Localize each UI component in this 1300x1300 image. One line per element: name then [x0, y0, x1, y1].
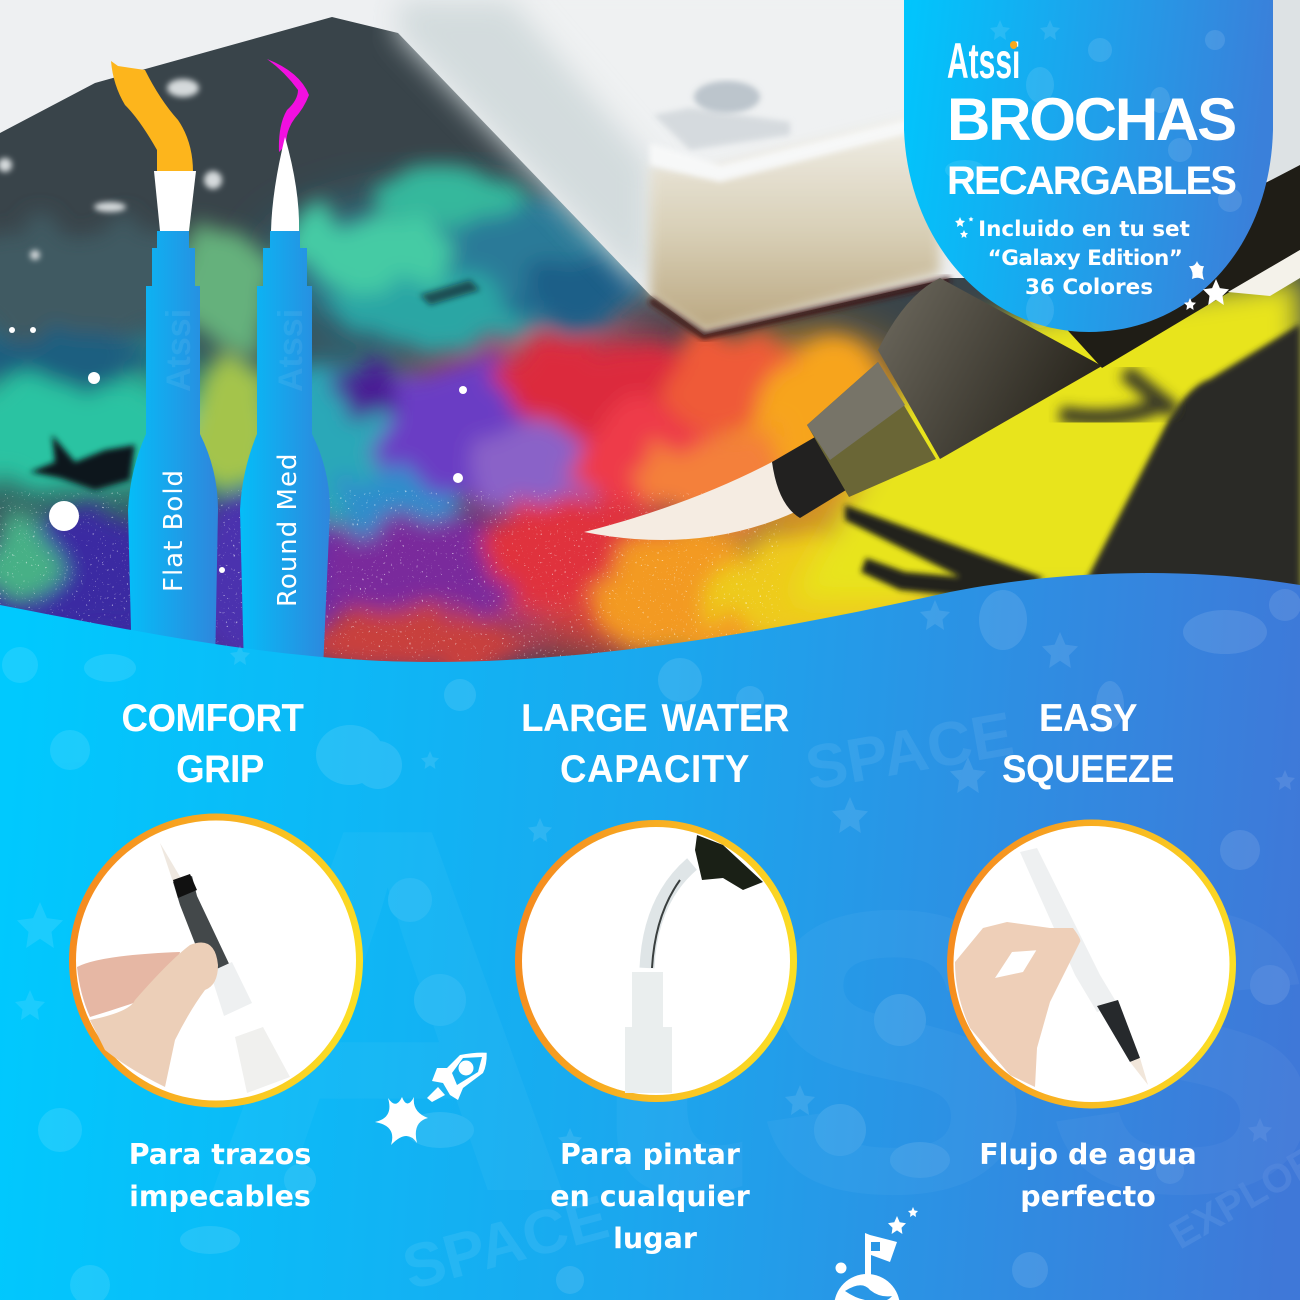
palette tray [398, 0, 1300, 336]
brush: flat bold [111, 61, 218, 670]
text: water capacity: Para pintar [560, 1138, 740, 1171]
circle: comfort grip [69, 814, 363, 1108]
heading: large water capacity [521, 697, 789, 791]
logo: Atssi [947, 33, 1020, 89]
badge [904, 0, 1273, 332]
heading: comfort grip [121, 697, 304, 791]
brush labels: Round Med [273, 453, 303, 607]
heading: large water capacity: CAPACITY [560, 748, 750, 791]
brush labels: Flat Bold [159, 469, 189, 592]
heading: easy squeeze: EASY [1039, 697, 1137, 740]
circle: easy squeeze [947, 820, 1236, 1108]
heading: large water capacity: LARGE WATER [521, 697, 789, 740]
pattern: faint space shapes [2, 589, 1300, 1300]
text: easy squeeze: perfecto [1020, 1180, 1156, 1213]
text: comfort grip: Para trazos [129, 1138, 311, 1171]
icon: planet with flag [834, 1207, 918, 1300]
text: easy squeeze: Flujo de agua [979, 1138, 1197, 1171]
brush labels [159, 453, 303, 607]
brush: round med: Atssi [272, 309, 310, 392]
pattern: faint space shapes: SPACE [800, 700, 1018, 804]
badge pattern [945, 20, 1242, 328]
heading: comfort grip: COMFORT [121, 697, 303, 740]
brush: flat bold: Atssi [160, 309, 198, 392]
heading: comfort grip: GRIP [176, 748, 264, 791]
heading: easy squeeze [1002, 697, 1174, 791]
title: BROCHAS [947, 86, 1235, 153]
text: water capacity: lugar [613, 1222, 697, 1255]
text: easy squeeze [979, 1138, 1197, 1213]
badge note: 36 Colores [1025, 275, 1153, 300]
yellow painted paper [790, 278, 1300, 600]
badge note [978, 217, 1190, 300]
sparkles [955, 216, 1229, 310]
badge note: Incluido en tu set [978, 217, 1190, 242]
text: comfort grip: impecables [129, 1180, 311, 1213]
text: water capacity [550, 1138, 750, 1255]
heading: easy squeeze: SQUEEZE [1002, 748, 1174, 791]
text: water capacity: en cualquier [550, 1180, 750, 1213]
blue wave panel [0, 573, 1300, 1300]
circle: large water capacity [515, 820, 797, 1102]
icon: rocket and star [375, 1053, 487, 1145]
brush: round med [240, 59, 330, 670]
badge note: “Galaxy Edition” [988, 246, 1182, 271]
photo: watercolor galaxy painting [0, 0, 1300, 700]
photo: water brush [584, 165, 1300, 540]
paint splatter [30, 280, 480, 490]
subtitle: RECARGABLES [947, 159, 1235, 203]
pattern: faint space shapes: SPACE [396, 1183, 616, 1300]
text: comfort grip [129, 1138, 311, 1213]
